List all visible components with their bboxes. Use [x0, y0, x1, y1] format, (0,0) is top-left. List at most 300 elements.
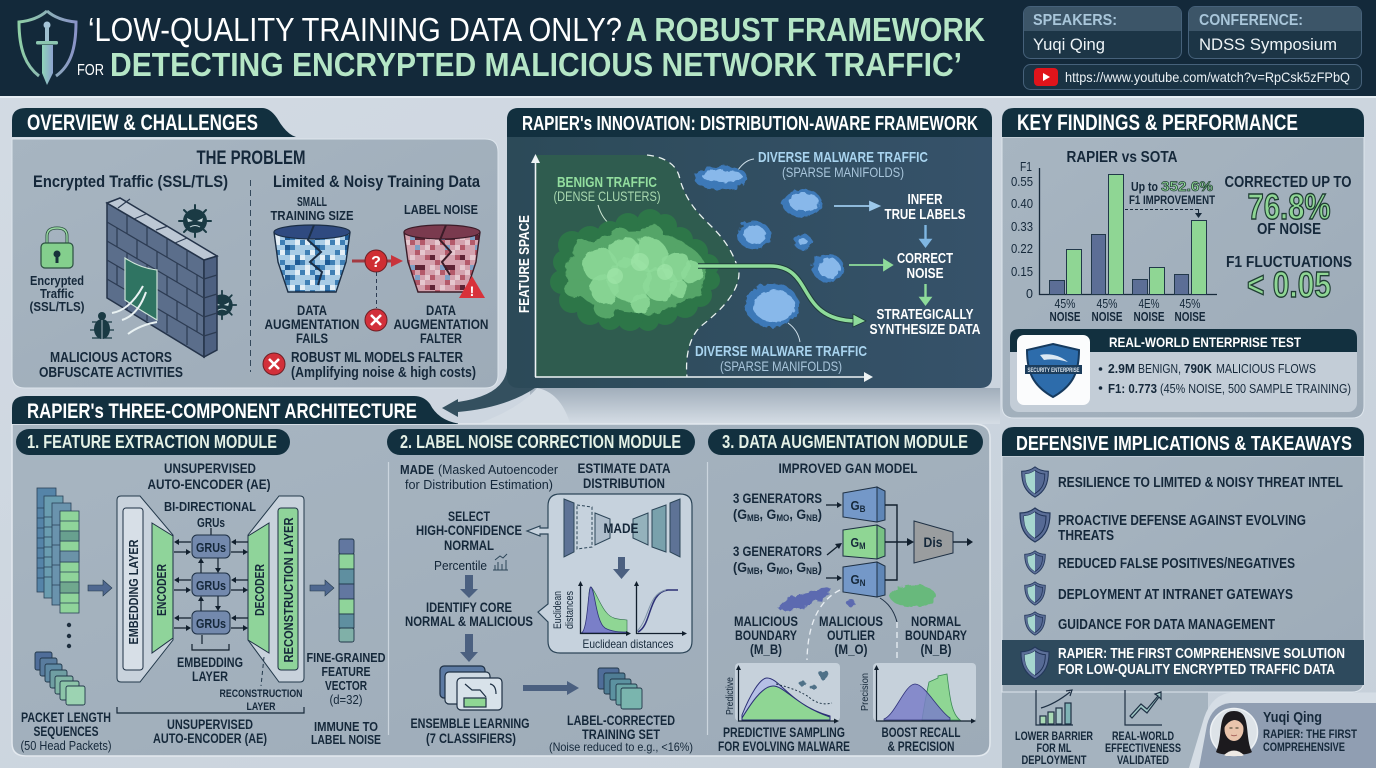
arrow: MADE to charts [613, 557, 630, 579]
GRU block 3 [192, 611, 230, 634]
panel: overview and challenges [12, 108, 498, 388]
label: immune to label noise: LABEL NOISE [311, 732, 381, 747]
label: unsupervised AE top: UNSUPERVISED [164, 460, 256, 476]
percentile with icon [434, 554, 508, 573]
text: robust ml models falter [291, 350, 476, 381]
x axis labels: NOISE [1134, 310, 1164, 324]
x axis labels: NOISE [1050, 310, 1080, 324]
icon: red cross models falter [263, 353, 285, 375]
text: MADE definition: (Masked Autoencoder [438, 462, 559, 477]
y axis labels [1011, 160, 1033, 301]
generator block middle: G [850, 535, 861, 550]
bullet: flows: 2.9M [1108, 361, 1135, 376]
label: reconstruction layer [220, 657, 303, 713]
arrow: correct to synthesize [921, 284, 930, 304]
heading: key findings: KEY FINDINGS & PERFORMANCE [1017, 110, 1298, 135]
bullet: flows: 790K [1184, 361, 1213, 376]
generator block bottom [843, 562, 885, 597]
chart: recall and precision [859, 663, 976, 724]
the problem heading: THE PROBLEM [196, 148, 306, 169]
lock label: (SSL/TLS) [30, 299, 84, 314]
label: malicious boundary: (M_B) [750, 642, 782, 657]
stat: corrected noise: 76.8% [1248, 186, 1330, 227]
label: unsupervised AE bottom: AUTO-ENCODER (AE) [153, 731, 267, 746]
panel: defensive implications [1002, 427, 1364, 768]
label: malicious outlier: OUTLIER [827, 628, 875, 643]
takeaway: data management [1025, 612, 1275, 635]
step: identify core: NORMAL & MALICIOUS [405, 614, 533, 629]
label: generators top: ) [818, 506, 822, 522]
subhead: limited and noisy data: Limited & Noisy Training Data [273, 172, 480, 191]
label: normal boundary: BOUNDARY [905, 628, 967, 643]
stat: f1 fluctuations: < 0.05 [1247, 264, 1331, 305]
label: label-corrected training set: LABEL-CORRECTED [567, 713, 675, 728]
label: label-corrected training set [549, 713, 693, 754]
MADE callout box [527, 494, 692, 653]
text: robust ml models falter: (Amplifying noise & high costs) [291, 365, 476, 381]
arrow: AE to vector [310, 580, 334, 596]
icon: enterprise shield logo: SECURITY ENTERPRISE [1028, 367, 1080, 374]
x axis labels: 4E% [1138, 297, 1160, 311]
label: packet length sequences: (50 Head Packets) [20, 739, 112, 753]
y axis labels: 0.33 [1011, 220, 1033, 234]
card: real-world enterprise test [1010, 329, 1357, 412]
pill heading: module 3 [708, 429, 983, 455]
label: augmentation falter: DATA [426, 303, 456, 318]
youtube link [1024, 64, 1362, 90]
label: bi-directional GRUs [164, 499, 256, 530]
speakers box: Yuqi Qing [1033, 35, 1105, 54]
GRU block 2: GRUs [196, 578, 226, 593]
header band [0, 0, 1376, 98]
y axis labels: 0.15 [1011, 265, 1033, 279]
feature vector [339, 539, 354, 642]
step: select high-confidence normal: NORMAL [444, 538, 494, 553]
GRU block 3: GRUs [196, 616, 226, 631]
label: small training size: SMALL [297, 194, 327, 209]
step: select high-confidence normal [416, 509, 522, 553]
generator block top: B [860, 504, 866, 514]
speaker name: Yuqi Qing [1263, 709, 1322, 726]
axis label: feature space: FEATURE SPACE [516, 215, 533, 313]
step: infer true labels: TRUE LABELS [884, 207, 966, 223]
label: boost recall [882, 725, 960, 754]
x axis labels: 45% [1054, 297, 1076, 311]
label: unsupervised AE bottom [153, 717, 267, 746]
label: generators bottom [733, 543, 822, 576]
generator block top [843, 487, 885, 522]
label: normal boundary [905, 614, 967, 657]
step: correct noise: CORRECT [897, 251, 953, 267]
chart: cumulative curve [634, 581, 687, 636]
stat: f1 fluctuations [1226, 254, 1352, 305]
label: fine-grained feature vector: (d=32) [330, 692, 362, 707]
label: predictive sampling [718, 725, 850, 754]
title: ‘LOW-QUALITY TRAINING DATA ONLY? [88, 11, 622, 48]
label: generators bottom: (G [733, 559, 749, 575]
panel: key findings [1002, 108, 1364, 418]
icon: shield with sword logo [19, 11, 76, 85]
label: augmentation fails [264, 303, 360, 346]
encoder block [152, 523, 173, 653]
chart: distance density [552, 581, 631, 636]
label: unsupervised AE top: AUTO-ENCODER (AE) [148, 476, 270, 492]
discriminator block [914, 521, 973, 563]
takeaway: proactive defense: PROACTIVE DEFENSE AGAINST EVOLVING [1058, 513, 1306, 529]
takeaway: reduced false positives [1025, 551, 1295, 574]
bullet: f1 result [1099, 381, 1351, 396]
reconstruction layer block: RECONSTRUCTION LAYER [281, 517, 296, 662]
label: reconstruction layer: LAYER [246, 701, 276, 713]
takeaway: reduced false positives: REDUCED FALSE POSITIVES/NEGATIVES [1058, 556, 1295, 572]
GRU block 1 [192, 535, 230, 558]
speaker caption: RAPIER: THE FIRST [1263, 727, 1358, 741]
label: benign traffic: (DENSE CLUSTERS) [554, 188, 660, 204]
generator block middle: M [859, 541, 866, 551]
label: immune to label noise: IMMUNE TO [314, 719, 378, 734]
label: generators bottom: NB [806, 566, 818, 576]
label: ensemble learning: (7 CLASSIFIERS) [426, 731, 516, 746]
y axis labels: 0.22 [1011, 242, 1033, 256]
conference box [1188, 6, 1362, 58]
takeaway: proactive defense: THREATS [1058, 528, 1114, 544]
GRU arrows [174, 528, 248, 650]
packet sequence stack [37, 488, 79, 613]
x axis labels: 45% [1096, 297, 1118, 311]
label: fine-grained feature vector: FEATURE [322, 664, 371, 679]
text: MADE definition: MADE [400, 462, 434, 477]
enterprise test title: REAL-WORLD ENTERPRISE TEST [1109, 334, 1301, 350]
chart title: RAPIER vs SOTA [1066, 149, 1178, 166]
label: bi-directional GRUs: BI-DIRECTIONAL [164, 499, 256, 514]
label: malicious boundary: BOUNDARY [735, 628, 797, 643]
y axis labels: F1 [1020, 160, 1032, 174]
step: synthesize data: STRATEGICALLY [876, 307, 974, 323]
label: ensemble learning: ENSEMBLE LEARNING [410, 716, 530, 731]
embedding layer block [123, 508, 143, 670]
bullet: flows: MALICIOUS FLOWS [1216, 361, 1316, 376]
text: MADE definition: for Distribution Estimation) [405, 477, 553, 492]
label: generators bottom: MB [747, 566, 760, 576]
icon: cracked red data bucket: ! [470, 283, 474, 299]
decoder block [248, 523, 269, 653]
module 1: feature extraction [16, 429, 386, 753]
step: synthesize data [870, 307, 981, 338]
icon: red arrow with question mark [352, 250, 403, 308]
stat: f1 fluctuations: F1 FLUCTUATIONS [1226, 254, 1352, 271]
label: malicious outlier: MALICIOUS [819, 614, 883, 629]
heading tab: overview: OVERVIEW & CHALLENGES [27, 110, 258, 135]
label: generators top: MO [776, 513, 789, 523]
caption: malicious actors: OBFUSCATE ACTIVITIES [39, 365, 183, 381]
label: small training size: TRAINING SIZE [270, 208, 354, 223]
reconstruction layer block [278, 508, 298, 670]
text: robust ml models falter: ROBUST ML MODELS FALTER [291, 350, 463, 366]
label: unsupervised AE top [148, 460, 270, 492]
label: generators bottom: MO [776, 566, 789, 576]
packet small stack [35, 652, 85, 705]
label: malicious outlier: (M_O) [834, 642, 868, 657]
module 2: label noise correction [387, 429, 695, 754]
speaker caption: COMPREHENSIVE [1263, 740, 1345, 754]
heading tab: architecture: RAPIER's THREE-COMPONENT ARCHITECTURE [27, 400, 417, 423]
generator block bottom: N [860, 578, 866, 588]
caption: malicious actors: MALICIOUS ACTORS [50, 350, 172, 366]
icon: red arrow with question mark: ? [371, 254, 381, 271]
label: real-world effectiveness: REAL-WORLD [1112, 731, 1174, 743]
malware clouds [694, 166, 844, 327]
y axis labels: 0 [1026, 287, 1033, 301]
chart: predictive sampling: Predictive [724, 677, 736, 715]
dashed links to charts [807, 590, 897, 660]
step: select high-confidence normal: HIGH-CONFIDENCE [416, 523, 522, 538]
label: unsupervised AE bottom: UNSUPERVISED [167, 717, 253, 732]
annotation: f1 improvement: 352.6% [1161, 178, 1214, 194]
feature space axes [531, 154, 873, 382]
icon: cracked blue data bucket [273, 224, 351, 293]
step: infer true labels [884, 192, 966, 223]
label: real-world effectiveness: EFFECTIVENESS [1105, 743, 1181, 755]
speaker caption [1263, 727, 1358, 754]
label: augmentation falter: FALTER [420, 331, 462, 346]
bullet: f1 result: F1: 0.773 [1108, 381, 1157, 396]
label: packet length sequences [20, 710, 112, 753]
label: diverse malware top [738, 149, 928, 180]
arrow: into infer [834, 202, 879, 210]
label: lower barrier [1015, 731, 1094, 767]
arrow: flow from benign to synthesize [698, 266, 866, 327]
connector to discriminator [885, 505, 914, 580]
label: fine-grained feature vector: FINE-GRAINED [306, 650, 386, 665]
label: label-corrected training set: (Noise reduced to e.g., <16%) [549, 740, 693, 754]
caption: euclidean distances: Euclidean distances [582, 637, 674, 651]
pill heading: module 1 [16, 429, 290, 455]
autoencoder frame [117, 496, 304, 682]
takeaway: deployment: DEPLOYMENT AT INTRANET GATEWAYS [1058, 587, 1293, 603]
takeaway: resilience [1022, 467, 1343, 497]
y axis labels: 0.40 [1011, 197, 1033, 211]
speaker portrait [1210, 708, 1258, 756]
icon: padlock [41, 228, 73, 268]
title [77, 11, 985, 83]
cluster: normal boundary [890, 585, 936, 607]
label: diverse malware bottom: (SPARSE MANIFOLDS) [720, 358, 842, 374]
label: generators top [733, 490, 822, 523]
takeaway: proactive defense [1020, 508, 1306, 544]
stat: corrected noise: CORRECTED UP TO [1224, 174, 1352, 191]
label: packet length sequences: PACKET LENGTH [21, 710, 111, 725]
icon: brick firewall [107, 198, 217, 357]
chart: distance density: Euclidean [552, 591, 564, 629]
chart: distance density: distances [564, 591, 576, 629]
panel: three component architecture [12, 396, 990, 756]
pill heading: module 1: 1. FEATURE EXTRACTION MODULE [27, 432, 277, 452]
stat: corrected noise [1224, 174, 1352, 238]
discriminator block: Dis [924, 534, 943, 550]
icon: enterprise shield logo [1017, 335, 1090, 405]
generator arrows [826, 502, 842, 581]
pill heading: module 2 [387, 429, 695, 455]
label: boost recall: & PRECISION [888, 739, 954, 754]
y axis labels: 0.55 [1011, 175, 1033, 189]
label: immune to label noise [311, 719, 381, 747]
step: identify core: IDENTIFY CORE [426, 600, 512, 615]
decoder block: DECODER [252, 564, 267, 616]
speakers box: SPEAKERS: [1033, 12, 1117, 29]
label: benign traffic: BENIGN TRAFFIC [557, 174, 657, 191]
label: diverse malware top: DIVERSE MALWARE TRAFFIC [758, 149, 928, 166]
arrow: identify to ensemble [460, 634, 478, 662]
pill heading: module 3: 3. DATA AUGMENTATION MODULE [722, 432, 968, 452]
takeaway: data management: GUIDANCE FOR DATA MANAGEMENT [1058, 617, 1275, 633]
label: embedding layer [177, 655, 243, 684]
heading: estimate data distribution [578, 461, 671, 491]
title: A ROBUST FRAMEWORK [626, 11, 985, 48]
stat: corrected noise: OF NOISE [1257, 221, 1321, 238]
chart: predictive sampling [724, 663, 840, 724]
icon: malware behind wall [179, 205, 211, 237]
step: identify core [405, 600, 533, 629]
label: reconstruction layer: RECONSTRUCTION [220, 688, 303, 700]
label: label noise: LABEL NOISE [404, 202, 478, 217]
x axis labels: NOISE [1092, 310, 1122, 324]
label: real-world effectiveness: VALIDATED [1117, 755, 1169, 767]
label: lower barrier: FOR ML [1036, 743, 1072, 755]
GRU block 1: GRUs [196, 540, 226, 555]
heading: improved gan: IMPROVED GAN MODEL [778, 460, 918, 476]
label: normal boundary: (N_B) [920, 642, 952, 657]
module 3: data augmentation [708, 429, 983, 754]
lock label [30, 273, 84, 314]
benign traffic cloud [550, 209, 720, 331]
label: generators top: , G [789, 506, 806, 522]
youtube link: https://www.youtube.com/watch?v=RpCsk5zFPbQ [1065, 69, 1350, 85]
label: generators top: MB [747, 513, 760, 523]
arrow: percentile to identify [460, 575, 478, 598]
encoder block: ENCODER [154, 564, 169, 616]
icon: malware right of wall [208, 291, 236, 319]
label: packet length sequences: SEQUENCES [34, 724, 98, 739]
icon: ensemble cards [440, 666, 502, 710]
panel: innovation framework [507, 108, 992, 388]
annotation: f1 improvement [1125, 178, 1215, 218]
label: embedding layer: LAYER [192, 669, 228, 684]
annotation: f1 improvement: F1 IMPROVEMENT [1129, 195, 1215, 207]
speaker card [1189, 692, 1376, 768]
label: embedding layer: EMBEDDING [177, 655, 243, 670]
text: MADE definition [400, 462, 559, 492]
label: generators top: 3 GENERATORS [733, 490, 822, 506]
label: augmentation falter [394, 303, 488, 346]
label: malicious boundary: MALICIOUS [734, 614, 798, 629]
label: fine-grained feature vector [306, 650, 386, 707]
label: small training size [270, 194, 354, 223]
label: generators bottom: , G [789, 559, 806, 575]
embedding layer block: EMBEDDING LAYER [126, 539, 141, 644]
heading: innovation: RAPIER's INNOVATION: DISTRIBUTION-AWARE FRAMEWORK [522, 113, 978, 135]
step: correct noise [897, 251, 953, 282]
arrow: ensemble to training set [523, 681, 579, 695]
label: generators top: (G [733, 506, 749, 522]
bar chart: rapier vs sota [1011, 160, 1217, 324]
caption: malicious actors [39, 350, 183, 381]
x axis labels: NOISE [1174, 310, 1206, 324]
arrow: infer to correct [921, 225, 930, 246]
label: augmentation fails: AUGMENTATION [264, 317, 360, 332]
label: generators bottom: , G [760, 559, 776, 575]
chart: recall and precision: Precision [859, 673, 871, 711]
takeaway: deployment [1025, 582, 1293, 605]
icon: red cross [365, 309, 387, 331]
step: correct noise: NOISE [906, 266, 944, 282]
label: boost recall: BOOST RECALL [882, 725, 960, 740]
conference box: NDSS Symposium [1199, 35, 1337, 54]
label: malicious outlier [819, 614, 883, 657]
label: bi-directional GRUs: GRUs [197, 515, 225, 530]
heading: estimate data distribution: DISTRIBUTION [583, 476, 665, 491]
label: lower barrier: DEPLOYMENT [1022, 755, 1086, 767]
shaded area under innovation panel [530, 388, 1000, 424]
ellipsis dots [67, 623, 71, 648]
label: label-corrected training set: TRAINING SET [582, 727, 661, 742]
step: infer true labels: INFER [908, 192, 943, 208]
x axis labels: 45% [1180, 297, 1200, 311]
cluster: malicious outlier [847, 599, 855, 607]
arrow: innovation panel to architecture [442, 350, 570, 423]
label: diverse malware top: (SPARSE MANIFOLDS) [782, 164, 904, 180]
banner: first comprehensive solution [1002, 640, 1364, 685]
conference box: CONFERENCE: [1199, 12, 1303, 29]
cluster: malicious boundary [777, 588, 832, 610]
arrow: into correct [849, 260, 892, 270]
icon: corrected training stack [598, 668, 642, 709]
bars [1050, 174, 1206, 294]
label: augmentation fails: DATA [297, 303, 327, 318]
label: generators bottom: 3 GENERATORS [733, 543, 822, 559]
bullet: flows [1099, 361, 1316, 376]
icon: cracked red data bucket [400, 225, 490, 299]
subhead: encrypted traffic: Encrypted Traffic (SSL/TLS) [33, 172, 228, 191]
percentile with icon: Percentile [434, 558, 487, 573]
label: ensemble learning [410, 716, 530, 746]
arrow: packets to AE [88, 580, 112, 596]
label: fine-grained feature vector: VECTOR [325, 678, 367, 693]
label: predictive sampling: PREDICTIVE SAMPLING [723, 725, 845, 740]
MADE network diagram [564, 499, 680, 557]
heading: innovation [507, 108, 992, 137]
label: augmentation falter: AUGMENTATION [394, 317, 488, 332]
generator block bottom: G [850, 572, 861, 587]
label: generators bottom: ) [818, 559, 822, 575]
label: malicious boundary [734, 614, 798, 657]
label: generators top: , G [760, 506, 776, 522]
title: DETECTING ENCRYPTED MALICIOUS NETWORK TRAFFIC’ [110, 46, 962, 83]
speakers box [1024, 6, 1182, 58]
step: synthesize data: SYNTHESIZE DATA [870, 322, 981, 338]
pill heading: module 2: 2. LABEL NOISE CORRECTION MODULE [400, 432, 681, 452]
label: diverse malware bottom: DIVERSE MALWARE TRAFFIC [695, 343, 867, 360]
step: select high-confidence normal: SELECT [448, 509, 491, 524]
label: generators top: NB [806, 513, 818, 523]
label: benign traffic [554, 174, 660, 226]
label: diverse malware bottom [695, 323, 867, 374]
bullet: flows: BENIGN, [1138, 361, 1181, 376]
label: augmentation fails: FAILS [296, 331, 328, 346]
lock label: Encrypted [30, 273, 84, 288]
annotation: f1 improvement: Up to [1131, 180, 1158, 194]
label: normal boundary: NORMAL [911, 614, 961, 629]
label: lower barrier: LOWER BARRIER [1015, 731, 1094, 743]
